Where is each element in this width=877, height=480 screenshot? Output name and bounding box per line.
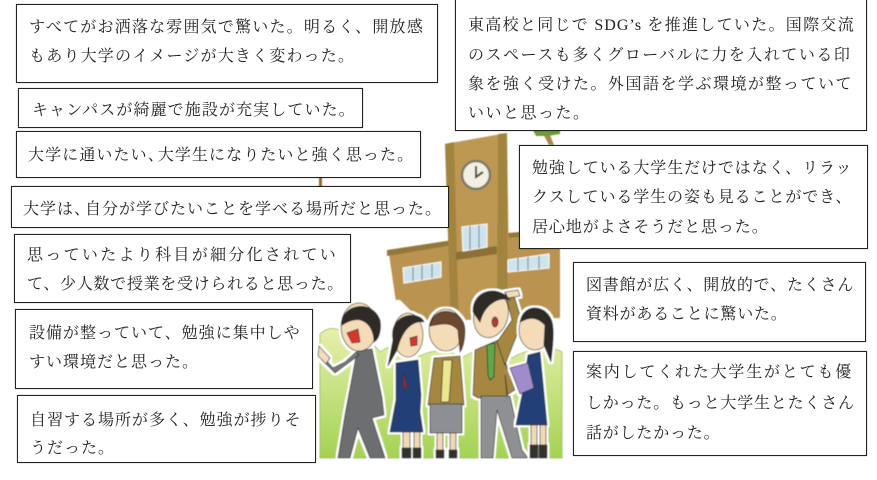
tree trunk and leaves	[319, 130, 560, 187]
student: girl in navy sailor uniform	[388, 313, 424, 458]
text box: SDGs and global focus: 東高校と同じで SDG’s を推進していた。国際交流	[468, 17, 855, 34]
text box: SDGs and global focus	[455, 0, 867, 131]
text box: relaxed students: クスしている学生の姿も見ることができ、	[532, 189, 852, 206]
text box: library	[573, 262, 866, 342]
text box: relaxed students: 勉強している大学生だけではなく、リラッ	[532, 160, 852, 177]
text box: self-study places	[17, 395, 316, 463]
text box: library: 資料があることに驚いた。	[586, 306, 788, 323]
text box: kind guide students: しかった。もっと大学生とたくさん	[586, 395, 855, 412]
text box: self-study places: うだった。	[30, 440, 115, 457]
text box: subdivided subjects: 思っていたより科目が細分化されてい	[27, 247, 338, 264]
text box: subdivided subjects: て、少人数で授業を受けられると思った。	[27, 276, 344, 293]
white sky haze above the bushes	[320, 300, 562, 358]
text box: want to attend	[16, 131, 421, 178]
text box: good facilities: 設備が整っていて、勉強に集中しや	[29, 325, 301, 342]
text box: SDGs and global focus: のスペースも多くグローバルに力を入れている印	[468, 47, 851, 64]
text box: place to learn	[11, 186, 449, 228]
windows	[403, 224, 549, 283]
text box: subdivided subjects	[14, 234, 351, 303]
text box: relaxed students	[519, 145, 868, 249]
student: boy with raised arm	[469, 288, 528, 458]
green bushes	[320, 328, 562, 458]
text box: place to learn: 大学は、自分が学びたいことを学べる場所だと思った。	[23, 201, 442, 218]
student: boy in grey uniform	[318, 303, 385, 458]
text box: relaxed students: 居心地がよさそうだと思った。	[532, 219, 769, 236]
text box: good facilities	[15, 309, 313, 389]
text box: good facilities: すい環境だと思った。	[29, 354, 199, 371]
text box: kind guide students: 話がしたかった。	[586, 425, 720, 442]
text box: beautiful campus: キャンパスが綺麗で施設が充実していた。	[32, 102, 356, 119]
text box: SDGs and global focus: いいと思った。	[468, 105, 591, 122]
text box: beautiful campus	[18, 88, 363, 128]
clock	[462, 161, 490, 189]
school building with clock tower	[387, 133, 562, 340]
text box: fashionable atmosphere: もあり大学のイメージが大きく変わった。	[29, 48, 355, 65]
text box: want to attend: 大学に通いたい、大学生になりたいと強く思った。	[28, 147, 414, 164]
text box: kind guide students	[573, 351, 867, 456]
student: girl with book	[510, 308, 553, 458]
text box: self-study places: 自習する場所が多く、勉強が捗りそ	[30, 412, 302, 429]
text box: fashionable atmosphere: すべてがお洒落な雰囲気で驚いた。明るく、開放感	[29, 19, 424, 36]
text box: library: 図書館が広く、開放的で、たくさん	[586, 277, 854, 294]
student: girl in olive blazer	[428, 309, 465, 458]
text box: kind guide students: 案内してくれた大学生がとても優	[586, 364, 853, 381]
text box: fashionable atmosphere	[16, 4, 438, 83]
text box: SDGs and global focus: 象を強く受けた。外国語を学ぶ環境が整っていて	[468, 76, 853, 93]
